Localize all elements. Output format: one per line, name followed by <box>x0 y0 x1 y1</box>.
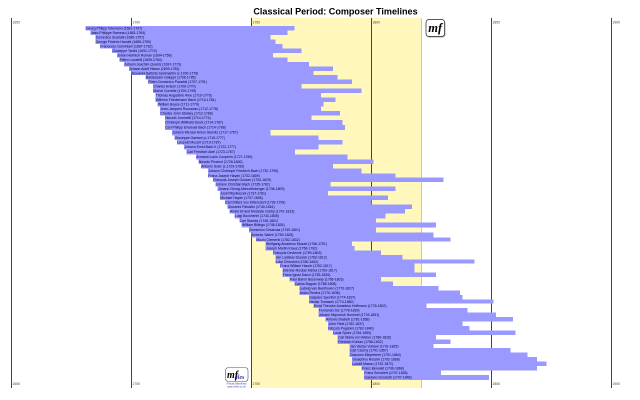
row: L. Mozart: Leopold Mozart (1719-1787) <box>177 140 221 144</box>
row: Locatelli: Pietro Locatelli (1695-1764) <box>120 58 162 62</box>
row: Paradisi <box>148 80 352 84</box>
row: Telemann: Georg Philipp Telemann (1681-1767) <box>86 26 142 30</box>
row: Berwald: Franz Berwald (1796-1868) <box>362 366 404 370</box>
axis: top year labels: 1650 <box>12 21 20 25</box>
row: Vorisek <box>350 344 434 348</box>
row: Kuhlau <box>338 339 450 344</box>
title: Classical Period: Composer Timelines <box>253 6 418 16</box>
row: Weber: Carl Maria von Weber (1786-1826) <box>338 335 391 339</box>
row: Abel <box>186 149 295 154</box>
row: Clementi: Muzio Clementi (1752-1832) <box>256 238 300 242</box>
axis: bottom year labels: 1850 <box>492 382 500 386</box>
row: Diabelli <box>326 317 513 322</box>
row: Tartini <box>112 48 302 53</box>
row: Gaetani: Giuseppe Gaetani (c.1718-1777) <box>175 136 225 140</box>
row: Jommelli <box>165 115 311 120</box>
row: Mehul: Etienne-Nicolas Méhul (1763-1817) <box>283 269 337 273</box>
row: Albrechtsberger <box>218 187 395 191</box>
row: Soler: Antonio Soler (c.1729-1783) <box>201 164 244 168</box>
row: Myslivecek: Josef Myslivecek (1737-1781) <box>220 192 266 196</box>
row: Billings: William Billings (1746-1826) <box>242 223 285 227</box>
row: Sor <box>318 308 467 313</box>
row: L. Mozart <box>177 140 342 144</box>
row: Tomasek <box>309 299 494 304</box>
row: Albrechtsberger: Johann Georg Albrechtsberger (1736-1809) <box>218 187 285 191</box>
row: Schubert: Franz Schubert (1797-1828) <box>364 371 408 375</box>
row: Field <box>328 322 462 326</box>
icon: mf logo top: mf <box>428 21 444 35</box>
row: Soler <box>201 164 333 169</box>
row: Paisiello <box>227 204 412 209</box>
row: Salieri <box>251 233 434 237</box>
row: Spontini <box>309 295 462 299</box>
row: Corrette <box>153 88 362 93</box>
row: Vorisek: Jan Vaclav Vorisek (1791-1825) <box>350 344 398 348</box>
row: Sor: Fernando Sor (1778-1839) <box>319 309 360 313</box>
row: C. P. E. Bach <box>165 125 345 130</box>
axis: bottom year labels: 1650 <box>12 382 20 386</box>
row: Avison: Charles Avison (1709-1770) <box>153 84 196 88</box>
row: Handel <box>95 39 275 44</box>
row: Telemann <box>86 26 294 30</box>
row: Roman <box>117 53 273 57</box>
row: Scarlatti: Domenico Scarlatti (1685-1757) <box>96 35 144 39</box>
axis: bottom year labels: 1750 <box>252 382 260 386</box>
row: J. E. Bach <box>184 144 318 149</box>
row: Paganini: Niccolò Paganini (1782-1840) <box>328 326 374 330</box>
row: Kraus: Joseph Martin Kraus (1756-1792) <box>266 246 317 250</box>
row: Spontini: Gaspare Spontini (1774-1837) <box>309 295 355 299</box>
row: Mason: Lowell Mason (1792-1872) <box>352 362 393 366</box>
row: A.-L. Couperin <box>196 154 347 160</box>
row: Schubert <box>364 370 441 375</box>
row: Boccherini <box>234 213 386 218</box>
axis: bottom year labels <box>12 382 620 386</box>
row: Paganini <box>328 326 470 330</box>
row: J. Haydn <box>208 173 395 178</box>
row: Rousseau <box>160 106 321 111</box>
row: Gluck: Christoph Willibald Gluck (1714-1787) <box>165 120 223 124</box>
row: Paisiello: Giovanni Paisiello (1740-1816) <box>228 205 275 209</box>
row: Field: John Field (1782-1837) <box>328 322 364 326</box>
row: Beethoven <box>299 286 438 290</box>
row: J. E. Bach: Johann Ernst Bach II (1722-1777) <box>184 145 236 149</box>
row: Avison <box>153 84 302 88</box>
row: Spohr <box>333 330 515 335</box>
row: J. C. F. Bach <box>208 169 362 173</box>
row: Rameau: Jean-Philippe Rameau (1683-1764) <box>91 31 145 35</box>
row: Piccinni: Niccolò Piccinni (1728-1800) <box>199 160 243 164</box>
row: Czerny <box>350 348 510 353</box>
row: Dussek <box>275 255 402 259</box>
row: Roman: Johan Helmich Roman (1694-1758) <box>117 53 172 57</box>
row: Hoffmann: Ernst Theodor Amadeus Hoffmann (1776-1822) <box>314 304 386 308</box>
timeline chart <box>86 26 546 380</box>
row: Bosenway: Paul Baron Bosenway (1766-1803) <box>290 278 344 282</box>
row: W. F. Bach: Wilhelm Friedemann Bach (1710-1784) <box>156 98 216 102</box>
row: Reicha: Anton Reicha (1770-1836) <box>300 291 340 295</box>
row: Mehul <box>282 268 414 273</box>
row: Hasse: Johann Adolf Hasse (1699-1783) <box>129 67 179 71</box>
row: Diabelli: Antonio Diabelli (1781-1858) <box>326 318 370 322</box>
row: W. F. Bach <box>155 97 335 102</box>
row: Czerny: Carl Czerny (1791-1857) <box>350 349 388 353</box>
row: Stanley: Charles John Stanley (1712-1786) <box>160 112 213 116</box>
row: Sammartini: Giovanni Battista Sammartini (c.1700-1775) <box>132 71 198 75</box>
row: Hauch: Franz William Hauch (1762-1817) <box>280 264 332 268</box>
row: Tartini: Giuseppe Tartini (1692-1770) <box>112 49 157 53</box>
row: Hauch <box>280 264 414 268</box>
row: Piccinni <box>198 160 374 164</box>
row: Hummel: Johann Nepomuk Hummel (1778-1851) <box>319 313 379 317</box>
row: Corrette: Michel Corrette (1709-1795) <box>153 89 196 93</box>
row: J. C. Bach <box>215 182 330 187</box>
row: Rousseau: Jean-Jacques Rousseau (1712-1778) <box>160 107 218 111</box>
row: J. C. Bach: Johann Christian Bach (1735-1782) <box>216 182 270 186</box>
row: Donizetti <box>364 375 489 380</box>
row: Devienne: François Devienne (1759-1803) <box>273 251 322 255</box>
icon: mf logo top <box>426 20 446 38</box>
row: Galuppi <box>146 75 338 80</box>
row: Hummel <box>318 313 496 317</box>
row: Clementi <box>256 237 450 242</box>
row: Baguer: Carlos Baguer (1768-1808) <box>295 282 336 286</box>
row: Berwald <box>362 366 537 370</box>
row: Reicha <box>299 290 460 295</box>
row: Hoffmann <box>314 304 426 308</box>
row: Donizetti: Gaetano Donizetti (1797-1848) <box>364 375 412 379</box>
row: J. C. F. Bach: Johann Christoph Friedrich Bach (1732-1795) <box>208 169 278 173</box>
icon: mfiles logo bottom: A Music Miscellany <box>226 382 247 386</box>
row: Quantz <box>124 62 309 66</box>
row: Boccherini: Luigi Boccherini (1743-1805) <box>235 214 279 218</box>
row: Arne <box>155 93 321 98</box>
row: Dittersdorf <box>225 200 371 204</box>
row: Gluck <box>165 120 342 125</box>
row: Rameau <box>90 30 287 35</box>
row: A.-L. Couperin: Armand-Louis Couperin (1727-1789) <box>196 155 252 159</box>
row: Danzi <box>282 273 436 277</box>
classical period band <box>251 18 422 388</box>
row: Devienne <box>273 250 381 255</box>
axis: bottom year labels: 1700 <box>132 382 140 386</box>
row: Quantz: Johann Joachim Quantz (1697-1773) <box>124 62 181 66</box>
row: Scarlatti <box>95 35 270 39</box>
row: Baguer <box>294 282 393 286</box>
row: Spohr: Louis Spohr (1784-1859) <box>333 331 371 335</box>
row: Galuppi: Baldassare Galuppi (1706-1785) <box>146 76 196 80</box>
row: Danzi: Franz Ignaz Danzi (1763-1826) <box>283 273 330 277</box>
icon: mfiles logo bottom: www.mfiles.co.uk <box>227 386 246 388</box>
row: M. Haydn: Michael Haydn (1737-1806) <box>220 196 263 200</box>
row: Cimarosa: Domenico Cimarosa (1749-1801) <box>249 228 300 232</box>
row: Jommelli: Niccolò Jommelli (1714-1774) <box>165 116 211 120</box>
row: Rossini: Gioachino Rossini (1792-1868) <box>352 358 400 362</box>
row: Dussek: Jan Ladislav Dussek (1760-1812) <box>276 255 327 259</box>
row: Gretry: André Ernest Modeste Grétry (1741-1813) <box>230 210 294 214</box>
axis: bottom year labels: 1900 <box>612 382 620 386</box>
row: Gretry <box>230 209 405 214</box>
row: Handel: George Frideric Handel (1685-1759) <box>96 40 151 44</box>
row: Boyce: William Boyce (1711-1779) <box>158 102 199 106</box>
row: Hasse <box>129 66 333 71</box>
row: Gossec: François-Joseph Gossec (1734-1829) <box>213 178 271 182</box>
row: Rossini <box>352 357 537 362</box>
row: Abel: Carl Friedrich Abel (1723-1787) <box>187 150 235 154</box>
row: Stanley <box>160 111 340 116</box>
row: Meyerbeer <box>350 353 527 357</box>
row: M. Haydn <box>220 196 388 200</box>
row: J. Haydn: Franz Joseph Haydn (1732-1809) <box>208 174 260 178</box>
icon: mfiles logo bottom <box>226 368 248 388</box>
icon: mfiles logo bottom: mf <box>227 370 240 381</box>
axis: bottom year labels: 1800 <box>372 382 380 386</box>
row: Paradisi: Pietro Domenico Paradisi (1707-1791) <box>148 80 207 84</box>
axis: top year labels: 1900 <box>612 21 620 25</box>
row: C. Stamitz <box>239 218 376 223</box>
row: Locatelli <box>119 57 287 62</box>
row: Bosenway <box>290 277 381 282</box>
row: Dittersdorf: Carl Ditters von Dittersdorf (1739-1799) <box>225 200 285 204</box>
axis: top year labels <box>12 21 620 25</box>
row: Kraus <box>266 246 354 250</box>
row: W. A. Mozart: Wolfgang Amadeus Mozart (1756-1791) <box>266 242 327 246</box>
row: W. A. Mozart <box>266 242 352 246</box>
row: Arne: Thomas Augustine Arne (1710-1778) <box>156 94 212 98</box>
row: C. P. E. Bach: Carl Philipp Emanuel Bach (1714-1788) <box>165 126 226 130</box>
row: Mason <box>352 362 546 366</box>
axis: top year labels: 1850 <box>492 21 500 25</box>
row: Geminiani: Francesco Geminiani (1687-1762) <box>100 44 153 48</box>
row: Weber <box>338 335 436 339</box>
row: Myslivecek <box>220 191 328 196</box>
row: Cherubini: Luigi Cherubini (1760-1842) <box>276 260 318 264</box>
row: Sammartini <box>131 71 314 75</box>
axis: top year labels: 1750 <box>252 21 260 25</box>
row: Boyce <box>158 102 323 106</box>
row: Cherubini <box>275 259 474 264</box>
icon: mfiles logo bottom: iles <box>236 375 245 381</box>
row: Kuhlau: Friedrich Kuhlau (1786-1832) <box>338 340 383 344</box>
axis: top year labels: 1800 <box>372 21 380 25</box>
row: Geminiani <box>100 44 282 48</box>
row: Meyerbeer: Giacomo Meyerbeer (1791-1864) <box>350 353 401 357</box>
row: Billings <box>242 223 436 228</box>
row: Salieri: Antonio Salieri (1750-1825) <box>252 233 293 237</box>
axis: top year labels: 1700 <box>132 21 140 25</box>
row: Beethoven: Ludwig van Beethoven (1770-1827) <box>300 286 354 290</box>
row: Gaetani <box>174 135 318 140</box>
row: J. Stamitz: Johann Wenzel Anton Stamitz (1717-1757) <box>172 130 238 134</box>
row: Cimarosa <box>249 228 376 233</box>
row: C. Stamitz: Carl Stamitz (1745-1801) <box>240 219 278 223</box>
row: J. Stamitz <box>172 130 270 135</box>
row: Gossec <box>213 177 443 182</box>
row: Tomasek: Vaclav Tomasek (1774-1850) <box>309 300 354 304</box>
